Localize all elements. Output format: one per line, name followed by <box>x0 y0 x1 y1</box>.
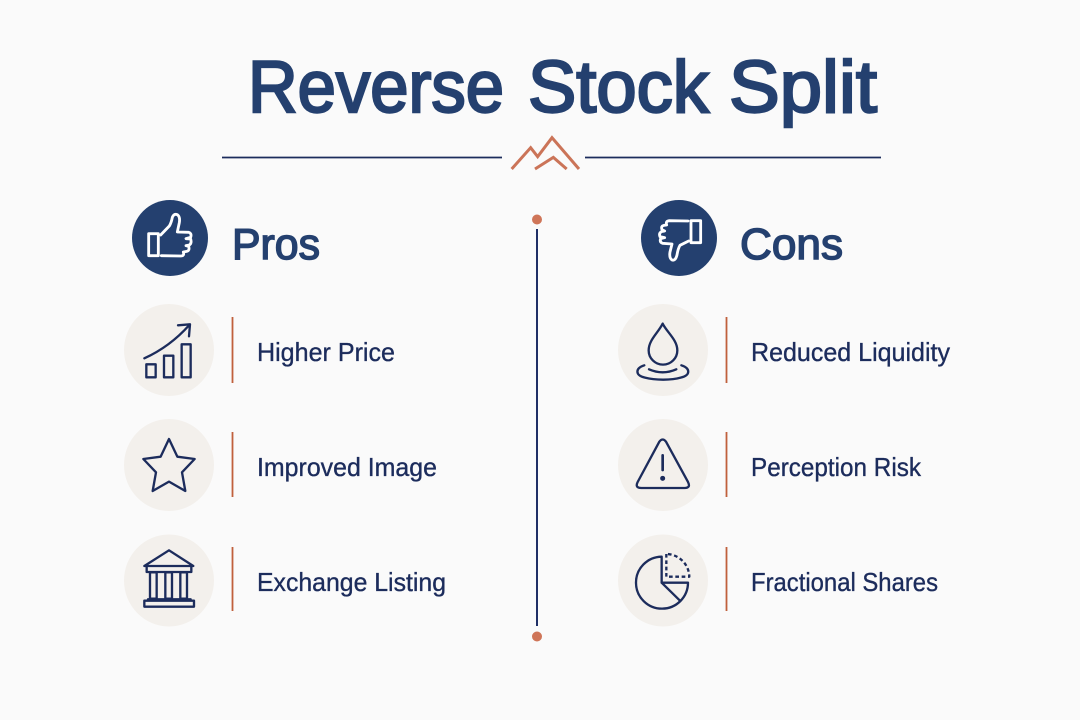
panel: cons <box>618 200 950 626</box>
item: exchange listing <box>124 534 446 626</box>
title: Reverse <box>248 47 504 128</box>
icon: warning triangle <box>637 439 689 488</box>
item: improved image: Improved Image <box>257 452 437 482</box>
center divider <box>532 214 542 642</box>
heading: pros: Pros <box>232 220 320 269</box>
item: perception risk: Perception Risk <box>751 452 922 482</box>
item: reduced liquidity: Reduced Liquidity <box>751 337 950 367</box>
item: reduced liquidity <box>618 304 950 396</box>
icon: thumbs down badge <box>641 200 717 276</box>
icon: exchange building <box>144 550 194 607</box>
item: improved image <box>124 419 437 511</box>
item: fractional shares: Fractional Shares <box>751 567 938 597</box>
item: higher price: Higher Price <box>257 337 395 367</box>
icon: water drop <box>637 324 688 380</box>
title: Split <box>729 47 877 128</box>
item: fractional shares <box>618 534 938 626</box>
title divider with mountain emblem <box>222 138 881 169</box>
icon: mountain <box>512 138 579 169</box>
title <box>248 47 877 128</box>
item: perception risk <box>618 419 922 511</box>
icon: pie chart with dashed slice <box>636 554 689 609</box>
icon: star <box>143 439 195 491</box>
title: Stock <box>528 47 709 128</box>
heading: cons: Cons <box>740 220 843 269</box>
icon: thumbs up badge <box>132 200 208 276</box>
panel: pros <box>124 200 446 626</box>
icon: rising bar chart <box>144 324 191 377</box>
item: exchange listing: Exchange Listing <box>257 567 446 597</box>
item: higher price <box>124 304 395 396</box>
